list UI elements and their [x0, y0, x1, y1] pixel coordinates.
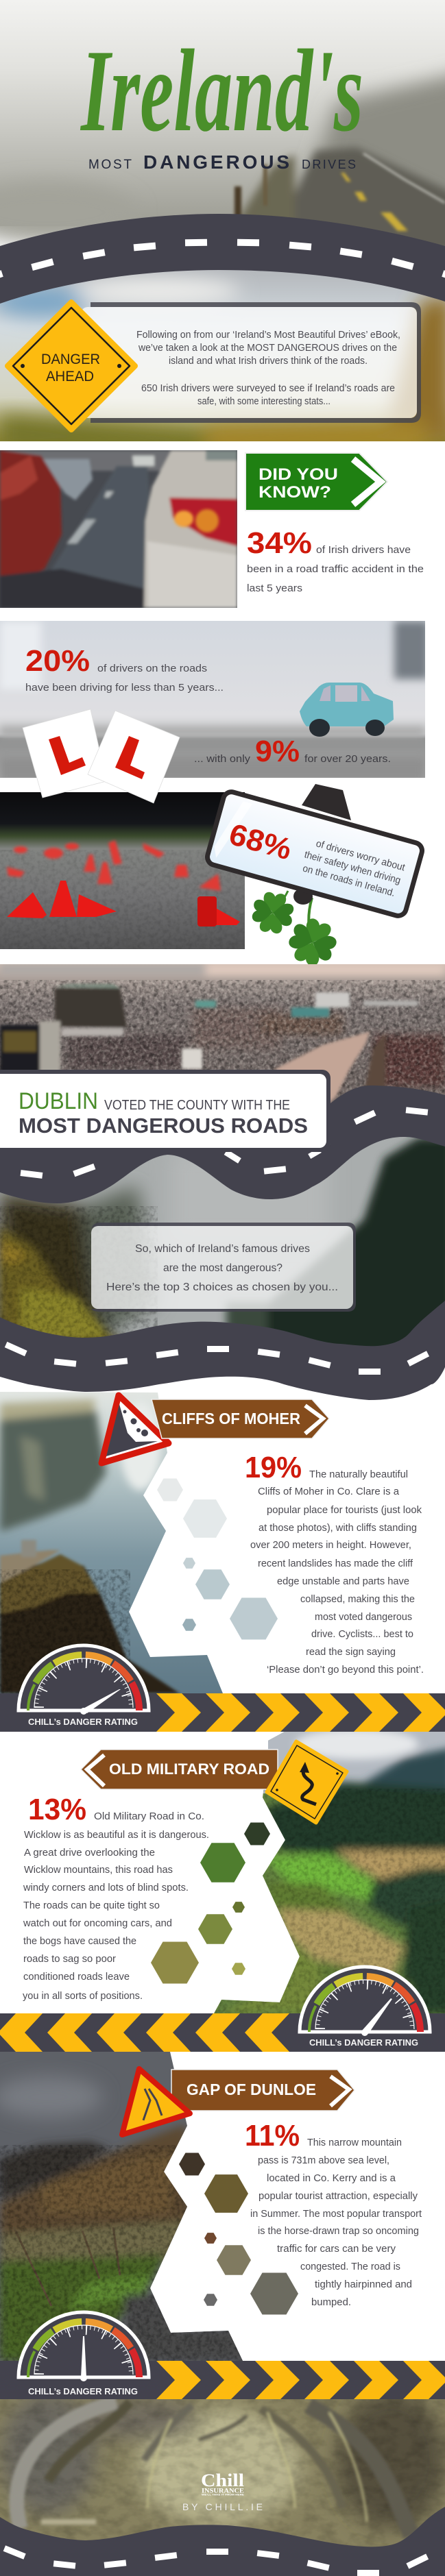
panel: Dublin heading	[0, 1070, 330, 1152]
text: Cliffs of Moher: over 200 meters in height. However,	[250, 1540, 411, 1551]
gauge: Gap of Dunloe danger rating	[19, 2312, 149, 2396]
road: winding upper	[0, 1085, 445, 1203]
text: Old Military Road	[23, 1793, 209, 2002]
panel: intro: island and what Irish drivers think of the roads.	[169, 356, 368, 367]
text: Cliffs of Moher: most voted dangerous	[315, 1612, 412, 1623]
sign: Cliffs of Moher	[152, 1399, 329, 1438]
photo: Cliffs of Moher	[0, 1392, 226, 1693]
sign: Old Military Road	[81, 1750, 278, 1789]
photo: toy car on road	[0, 621, 429, 781]
sign: Gap of Dunloe	[171, 2070, 354, 2111]
panel: intro: we’ve taken a look at the MOST DANGEROUS drives on the	[138, 343, 397, 354]
road: winding lower	[0, 1301, 445, 1400]
sign: did you know: DID YOU	[258, 465, 338, 484]
panel: Dublin heading: DUBLIN	[19, 1088, 98, 1114]
text: 68% caption	[300, 836, 406, 900]
photo: fallen cones	[0, 792, 245, 949]
subtitle: DANGEROUS	[143, 151, 289, 173]
photo: foggy forest	[0, 1137, 445, 1346]
hexagon tiles: Gap of Dunloe	[179, 2152, 298, 2314]
text: Gap of Dunloe	[245, 2119, 422, 2308]
text: by chill.ie: BY CHILL.IE	[182, 2501, 263, 2512]
text: Old Military Road: Old Military Road in Co.	[94, 1811, 204, 1822]
icon: danger ahead diamond sign: AHEAD	[46, 369, 94, 384]
text: Cliffs of Moher: collapsed, making this the	[300, 1594, 415, 1605]
sign: Old Military Road: OLD MILITARY ROAD	[109, 1761, 269, 1778]
chevron band: Gap of Dunloe	[0, 2361, 445, 2399]
sign: Cliffs of Moher: CLIFFS OF MOHER	[162, 1410, 300, 1427]
text: Cliffs of Moher: read the sign saying	[306, 1647, 396, 1658]
panel: top 3 intro: Here’s the top 3 choices as chosen by you...	[106, 1281, 338, 1293]
icon: falling rocks triangle	[101, 1395, 169, 1463]
photo: traffic queue	[0, 450, 237, 608]
stat: 34%: of Irish drivers have	[316, 545, 411, 556]
text: Old Military Road: conditioned roads leave	[23, 1972, 130, 1983]
panel: Dublin heading: VOTED THE COUNTY WITH THE	[104, 1098, 290, 1113]
text: Cliffs of Moher: 19%	[245, 1451, 302, 1484]
text: Cliffs of Moher: at those photos), with cliffs standing	[258, 1523, 417, 1534]
gauge: Old Military Road danger rating	[300, 1967, 430, 2048]
text: 68% caption: their safety when driving	[303, 849, 402, 887]
stat: 34%: 34%	[247, 526, 312, 560]
hexagon tiles: Old Military Road	[151, 1822, 270, 1983]
text: Old Military Road: roads to sag so poor	[23, 1954, 116, 1965]
text: Gap of Dunloe: 11%	[245, 2119, 300, 2152]
text: Cliffs of Moher: Cliffs of Moher in Co. Clare is a	[258, 1486, 400, 1497]
text: Gap of Dunloe: congested. The road is	[300, 2261, 400, 2272]
logo: Chill Insurance: INSURANCE	[202, 2488, 244, 2494]
hero photo: misty road	[0, 0, 445, 452]
chevron band: Cliffs	[0, 1693, 445, 1732]
text: Gap of Dunloe: located in Co. Kerry and is a	[267, 2173, 396, 2184]
L plates	[23, 709, 180, 803]
road: footer	[0, 2507, 445, 2576]
hexagon tiles: Cliffs	[157, 1478, 278, 1639]
stat: 34%	[247, 526, 424, 594]
panel: intro: safe, with some interesting stats...	[197, 396, 330, 407]
text: Gap of Dunloe: traffic for cars can be very	[277, 2244, 396, 2255]
text: 68% caption: of drivers worry about	[315, 838, 406, 874]
logo: Chill Insurance: Chill	[201, 2470, 244, 2490]
stat: 9%: ... with only	[194, 754, 251, 765]
text: Gap of Dunloe: tightly hairpinned and	[315, 2279, 412, 2290]
logo: Chill Insurance: WE'LL TAKE IT FROM HERE	[202, 2493, 245, 2496]
panel: top 3 intro: are the most dangerous?	[163, 1262, 282, 1274]
rear view mirror callout	[206, 784, 424, 918]
text: Cliffs of Moher: recent landslides has made the cliff	[258, 1558, 413, 1569]
text: Cliffs of Moher: ‘Please don’t go beyond this point’.	[267, 1665, 424, 1676]
subtitle: DRIVES	[302, 158, 356, 171]
text: Gap of Dunloe: popular tourist attraction, especially	[258, 2191, 418, 2202]
stat: 68%: 68%	[226, 818, 296, 867]
panel: intro: Following on from our ‘Ireland’s Most Beautiful Drives’ eBook,	[136, 330, 400, 341]
text: Old Military Road: The roads can be quite tight so	[23, 1900, 160, 1911]
icon: winding road diamond	[267, 1741, 347, 1823]
icon: toy car	[300, 683, 394, 737]
text: Old Military Road: windy corners and lots of blind spots.	[23, 1882, 189, 1893]
shamrocks	[250, 890, 342, 972]
road band: hero	[0, 214, 445, 304]
sign: did you know	[245, 453, 387, 511]
subtitle	[88, 151, 356, 173]
icon: road narrows triangle	[122, 2069, 190, 2135]
text: Old Military Road: the bogs have caused the	[23, 1936, 136, 1947]
stat: 20%	[25, 644, 224, 694]
L plate: right	[88, 711, 180, 803]
L plate: left	[23, 709, 106, 798]
panel: top 3 intro	[91, 1223, 356, 1312]
sign: Gap of Dunloe: GAP OF DUNLOE	[187, 2081, 316, 2098]
text: Cliffs of Moher: edge unstable and parts have	[277, 1576, 409, 1587]
text: Cliffs of Moher: popular place for tourists (just look	[267, 1505, 422, 1516]
stat: 9%: for over 20 years.	[304, 754, 391, 765]
text: Cliffs of Moher: drive. Cyclists... best to	[311, 1629, 413, 1640]
panel: intro: 650 Irish drivers were surveyed to see if Ireland’s roads are	[141, 383, 395, 394]
logo: Chill Insurance	[201, 2470, 245, 2496]
gauge: Cliffs danger rating	[19, 1645, 149, 1727]
text: Old Military Road: Wicklow mountains, this road has	[24, 1865, 173, 1876]
chevron band: Old Military Road	[0, 2013, 445, 2052]
subtitle: MOST	[88, 158, 132, 172]
panel: Dublin heading: MOST DANGEROUS ROADS	[19, 1114, 308, 1138]
text: Old Military Road: watch out for oncoming cars, and	[23, 1918, 172, 1929]
photo: Gap of Dunloe	[0, 2052, 247, 2361]
stat: 34%: been in a road traffic accident in the	[247, 564, 424, 575]
icon: danger ahead diamond sign: DANGER	[41, 352, 100, 367]
text: Gap of Dunloe: bumped.	[311, 2297, 351, 2308]
text: Gap of Dunloe: This narrow mountain	[307, 2137, 402, 2148]
gauge: Old Military Road danger rating: CHILL’s DANGER RATING	[309, 2037, 418, 2048]
text: Old Military Road: Wicklow is as beautiful as it is dangerous.	[24, 1830, 209, 1841]
text: Old Military Road: 13%	[28, 1793, 86, 1826]
stat: 20%: of drivers on the roads	[97, 663, 207, 674]
text: Old Military Road: A great drive overlooking the	[24, 1848, 155, 1859]
text: Gap of Dunloe: is the horse-drawn trap so oncoming	[258, 2226, 419, 2237]
photo: Wicklow valley	[206, 1729, 445, 2013]
text: Cliffs of Moher: The naturally beautiful	[309, 1469, 408, 1480]
gauge: Cliffs danger rating: CHILL’s DANGER RATING	[28, 1717, 138, 1727]
text: 68% caption: on the roads in Ireland.	[302, 863, 396, 899]
gauge: Gap of Dunloe danger rating: CHILL’s DANGER RATING	[28, 2386, 138, 2396]
photo: Dublin cityscape	[0, 964, 445, 1103]
sign: did you know: KNOW?	[258, 483, 331, 502]
text: Cliffs of Moher	[245, 1451, 424, 1676]
stat: 20%: 20%	[25, 644, 90, 678]
text: Gap of Dunloe: pass is 731m above sea level,	[258, 2155, 389, 2166]
panel: intro	[81, 302, 421, 423]
icon: danger ahead diamond sign	[8, 302, 135, 430]
stat: 9%: 9%	[255, 735, 300, 768]
text: Gap of Dunloe: in Summer. The most popular transport	[250, 2209, 422, 2220]
stat: 34%: last 5 years	[247, 583, 302, 594]
panel: top 3 intro: So, which of Ireland’s famous drives	[135, 1243, 310, 1255]
stat: 20%: have been driving for less than 5 years...	[25, 683, 224, 694]
photo: Dark Hedges tree tunnel	[0, 2399, 445, 2547]
text: Old Military Road: you in all sorts of positions.	[23, 1991, 143, 2002]
stat: 9%	[194, 735, 391, 768]
